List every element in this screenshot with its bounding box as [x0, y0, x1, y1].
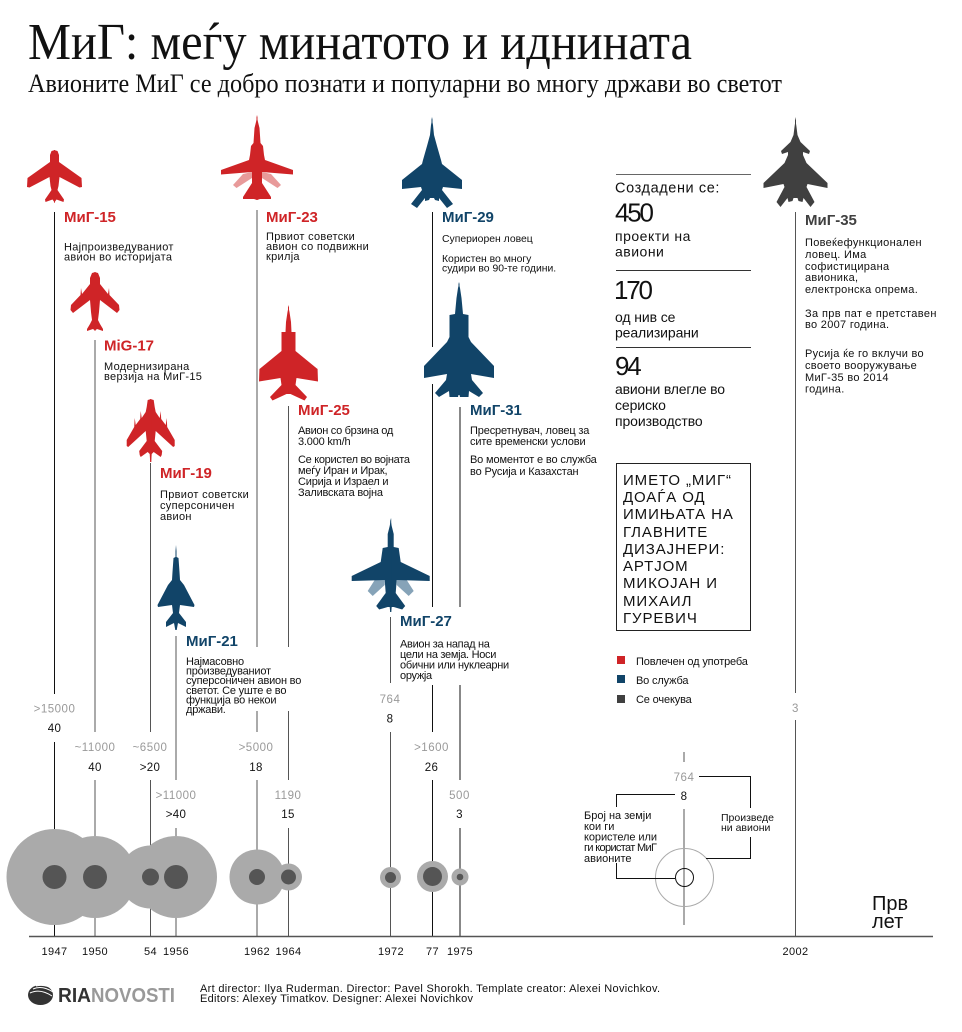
- legend: how to read bubbles: 8: [681, 791, 687, 803]
- callout: origin of the name: МИКОЈАН И: [623, 575, 718, 592]
- panel: MiG-35: [764, 117, 937, 396]
- panel: MiG-35: Повеќефункционален: [805, 237, 922, 249]
- legend: status: Во служба: [636, 675, 689, 687]
- panel: MiG-35: За прв пат е претставен: [805, 308, 937, 320]
- panel: MiG-35: електронска опрема.: [805, 284, 918, 296]
- panel: MiG-19: МиГ-19: [160, 465, 212, 482]
- axis label: first flight: лет: [872, 911, 903, 933]
- panel: statistics: 170: [614, 275, 653, 305]
- panel: MiG-25: [259, 305, 411, 499]
- year labels: 1972: [378, 946, 404, 958]
- year labels: 2002: [782, 946, 809, 958]
- panel: MiG-21: МиГ-21: [186, 633, 238, 650]
- production and country numbers: 8: [387, 714, 393, 726]
- panel: MiG-15: МиГ-15: [64, 209, 116, 226]
- panel: MiG-25: Сирија и Израел и: [298, 476, 388, 488]
- panel: MiG-23: авион со подвижни: [266, 241, 369, 253]
- production and country numbers: 26: [425, 762, 438, 774]
- legend: how to read bubbles: [584, 752, 774, 925]
- legend: how to read bubbles: ни авиони: [721, 822, 771, 834]
- year labels: 77: [426, 946, 439, 958]
- panel: statistics: авиони влегле во: [615, 381, 725, 397]
- production and country numbers: >15000: [34, 704, 75, 716]
- panel: MiG-35: година.: [805, 384, 845, 396]
- panel: MiG-19: суперсоничен: [160, 500, 235, 512]
- bubbles: produced aircraft and countries: [6, 829, 468, 925]
- panel: MiG-17: верзија на МиГ-15: [104, 371, 202, 383]
- panel: MiG-19: Првиот советски: [160, 489, 249, 501]
- credits: [200, 983, 660, 1005]
- credits: Editors: Alexey Timatkov. Designer: Alexei Novichkov: [200, 993, 474, 1005]
- panel: MiG-29: МиГ-29: [442, 209, 494, 226]
- panel: MiG-35: авионика,: [805, 272, 858, 284]
- year labels: 1956: [163, 946, 189, 958]
- panel: statistics: проекти на: [615, 228, 691, 244]
- legend: status: [617, 656, 749, 706]
- production and country numbers: 3: [456, 809, 463, 821]
- panel: MiG-31: сите временски услови: [470, 436, 585, 448]
- title: МиГ: меѓу минатото и иднината: [28, 14, 692, 71]
- panel: MiG-29: [402, 117, 556, 274]
- callout: origin of the name: ГУРЕВИЧ: [623, 610, 698, 627]
- panel: statistics: сериско: [615, 397, 666, 413]
- production and country numbers: 18: [249, 762, 263, 774]
- panel: MiG-21: функција во некои: [186, 694, 276, 706]
- panel: statistics: 450: [615, 198, 654, 228]
- production and country numbers: 1190: [275, 790, 301, 802]
- legend: status: Повлечен од употреба: [636, 656, 749, 668]
- year labels: 1962: [244, 946, 270, 958]
- production and country numbers: 500: [449, 790, 470, 802]
- panel: MiG-31: во Русија и Казахстан: [470, 466, 579, 478]
- timeline lines: [29, 210, 933, 936]
- callout: origin of the name: МИХАИЛ: [623, 593, 692, 610]
- panel: MiG-31: [424, 282, 598, 478]
- panel: MiG-31: Во моментот е во служба: [470, 454, 598, 466]
- production and country numbers: >1600: [414, 742, 449, 754]
- panel: MiG-35: софистицирана: [805, 261, 890, 273]
- panel: statistics: производство: [615, 413, 703, 429]
- legend: how to read bubbles: ги користат МиГ: [584, 842, 657, 854]
- logo: RIA Novosti: NOVOSTI: [91, 985, 175, 1007]
- production and country numbers: 764: [380, 694, 400, 706]
- panel: MiG-21: држави.: [186, 704, 226, 716]
- panel: MiG-25: Се користел во војната: [298, 454, 411, 466]
- icon: MiG-15: [27, 150, 82, 203]
- production and country numbers: ~11000: [75, 742, 115, 754]
- panel: MiG-29: Супериорен ловец: [442, 234, 533, 245]
- panel: MiG-21: суперсоничен авион во: [186, 675, 301, 687]
- icon: MiG-35: [764, 117, 828, 207]
- icon: MiG-17: [70, 272, 120, 331]
- panel: MiG-35: МиГ-35: [805, 212, 857, 229]
- panel: MiG-25: 3.000 km/h: [298, 436, 351, 448]
- panel: MiG-21: светот. Се уште е во: [186, 685, 286, 697]
- panel: MiG-25: МиГ-25: [298, 402, 350, 419]
- legend: how to read bubbles: 764: [674, 772, 694, 784]
- panel: MiG-35: во 2007 година.: [805, 319, 889, 331]
- panel: MiG-29: судири во 90-те години.: [442, 264, 556, 274]
- panel: MiG-35: Русија ќе го вклучи во: [805, 348, 924, 360]
- logo: RIA Novosti: RIA: [58, 985, 91, 1007]
- legend: how to read bubbles: авионите: [584, 853, 631, 865]
- panel: MiG-17: Модернизирана: [104, 361, 190, 373]
- year labels: [41, 946, 809, 958]
- year labels: 54: [144, 946, 157, 958]
- legend: how to read bubbles: кои ги: [584, 821, 614, 833]
- panel: MiG-21: [158, 545, 301, 716]
- callout: origin of the name: ГЛАВНИТЕ: [623, 524, 708, 541]
- icon: MiG-31: [424, 282, 494, 397]
- production and country numbers: 15: [281, 809, 295, 821]
- legend: how to read bubbles: Произведе: [721, 812, 774, 824]
- legend: how to read bubbles: Број на земји: [584, 810, 651, 822]
- callout: origin of the name: ДОАЃА ОД: [623, 489, 706, 506]
- production and country numbers: >20: [140, 762, 160, 774]
- panel: MiG-23: [221, 115, 369, 263]
- year labels: 1964: [275, 946, 302, 958]
- callout: origin of the name: ИМЕТО „МИГ“: [623, 472, 732, 489]
- panel: MiG-19: [127, 399, 249, 523]
- panel: MiG-15: авион во историјата: [64, 252, 173, 264]
- panel: MiG-25: Заливската војна: [298, 487, 384, 499]
- axis label: first flight: Прв: [872, 893, 908, 915]
- production and country numbers: 3: [792, 703, 799, 715]
- icon: MiG-19: [127, 399, 175, 462]
- panel: MiG-27: [352, 518, 509, 682]
- year labels: 1950: [82, 946, 108, 958]
- production and country numbers: 40: [88, 762, 102, 774]
- panel: MiG-35: своето вооружување: [805, 360, 917, 372]
- callout: origin of the name: [616, 464, 750, 630]
- panel: MiG-29: Користен во многу: [442, 254, 532, 265]
- subtitle: Авионите МиГ се добро познати и популарни во многу држави во светот: [28, 68, 782, 98]
- panel: MiG-35: МиГ-35 во 2014: [805, 372, 889, 384]
- panel: MiG-25: Авион со брзина од: [298, 425, 394, 437]
- panel: MiG-35: ловец. Има: [805, 249, 867, 261]
- panel: MiG-19: авион: [160, 511, 192, 523]
- panel: MiG-17: MiG-17: [104, 338, 154, 354]
- panel: MiG-27: Авион за напад на: [400, 638, 491, 650]
- panel: MiG-27: цели на земја. Носи: [400, 649, 496, 661]
- icon: MiG-29: [402, 117, 462, 208]
- panel: statistics: од нив се: [615, 309, 676, 325]
- panel: statistics: 94: [615, 351, 641, 381]
- panel: statistics: [614, 174, 751, 429]
- panel: MiG-15: [27, 150, 174, 264]
- production and country numbers: >5000: [239, 742, 273, 754]
- year labels: 1947: [41, 946, 68, 958]
- panel: MiG-21: Најмасовно: [186, 656, 244, 668]
- production and country numbers: ~6500: [133, 742, 167, 754]
- panel: MiG-27: обични или нуклеарни: [400, 660, 509, 672]
- production and country numbers: >11000: [156, 790, 196, 802]
- panel: MiG-31: МиГ-31: [470, 402, 522, 419]
- panel: MiG-23: Првиот советски: [266, 231, 355, 243]
- panel: statistics: Создадени се:: [615, 180, 720, 196]
- panel: MiG-27: оружја: [400, 670, 433, 682]
- panel: MiG-21: произведуваниот: [186, 666, 271, 678]
- panel: MiG-23: крилја: [266, 251, 300, 263]
- panel: MiG-23: МиГ-23: [266, 209, 318, 226]
- production and country numbers: >40: [166, 809, 186, 821]
- logo: RIA Novosti: [28, 985, 175, 1007]
- legend: how to read bubbles: користеле или: [584, 832, 657, 844]
- icon: MiG-27: [352, 518, 430, 612]
- production and country numbers: [34, 694, 799, 821]
- panel: statistics: авиони: [615, 244, 664, 260]
- icon: MiG-21: [158, 545, 194, 630]
- panel: MiG-31: Пресретнувач, ловец за: [470, 425, 590, 437]
- legend: status: Се очекува: [636, 694, 693, 706]
- panel: statistics: реализирани: [615, 324, 699, 340]
- panel: MiG-17: [70, 272, 202, 383]
- credits: Art director: Ilya Ruderman. Director: Pavel Shorokh. Template creator: Alexei Novichkov.: [200, 983, 660, 995]
- icon: MiG-23: [221, 115, 293, 200]
- panel: MiG-27: МиГ-27: [400, 613, 452, 630]
- icon: MiG-25: [259, 305, 318, 400]
- panel: MiG-25: меѓу Иран и Ирак,: [298, 465, 387, 477]
- callout: origin of the name: АРТЈОМ: [623, 558, 689, 575]
- callout: origin of the name: ДИЗАЈНЕРИ:: [623, 541, 725, 558]
- axis label: first flight: [872, 893, 908, 933]
- panel: MiG-15: Најпроизведуваниот: [64, 242, 174, 254]
- production and country numbers: 40: [48, 723, 61, 735]
- callout: origin of the name: ИМИЊАТА НА: [623, 506, 734, 523]
- year labels: 1975: [447, 946, 473, 958]
